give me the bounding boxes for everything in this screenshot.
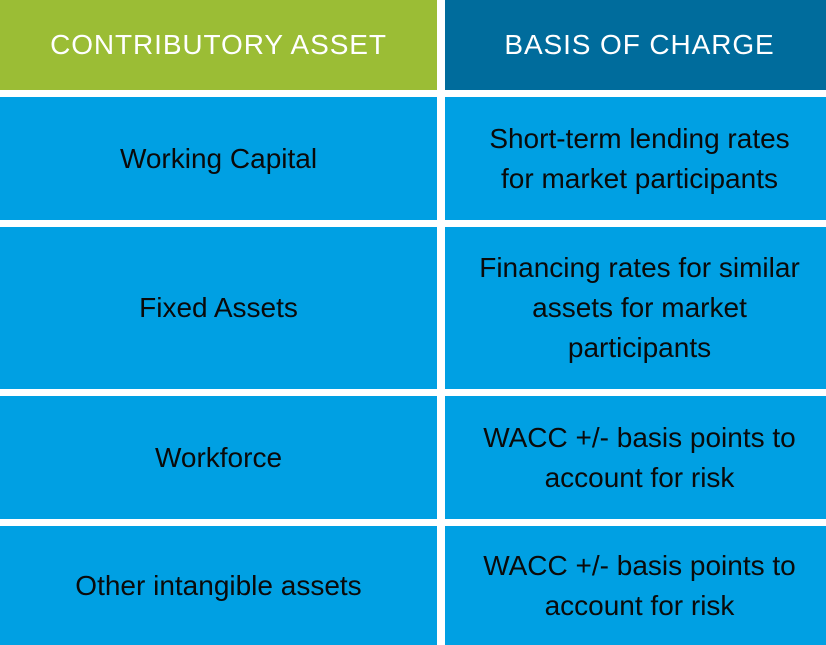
row 4 asset: Other intangible assets — [75, 570, 362, 600]
row 2 basis: assets for market — [532, 292, 747, 323]
row 3 asset: Workforce — [155, 442, 282, 472]
header: contributory asset: CONTRIBUTORY ASSET — [50, 29, 387, 60]
header: basis of charge: BASIS OF CHARGE — [504, 29, 775, 60]
row 1 basis: Short-term lending rates — [489, 122, 790, 154]
row 1 basis — [445, 97, 826, 220]
row 2 asset: Fixed Assets — [139, 292, 298, 323]
row 2 basis — [445, 227, 826, 389]
header: basis of charge — [445, 0, 826, 90]
row 3 basis — [445, 396, 826, 519]
row 4 asset — [0, 526, 437, 645]
row 4 basis: account for risk — [545, 590, 734, 620]
row 3 basis: WACC +/- basis points to — [483, 422, 796, 452]
row 1 asset — [0, 97, 437, 220]
row 2 asset — [0, 227, 437, 389]
header: contributory asset — [0, 0, 437, 90]
row 3 asset — [0, 396, 437, 519]
row 4 basis: WACC +/- basis points to — [483, 550, 796, 580]
row 2 basis: participants — [568, 332, 711, 363]
row 1 asset: Working Capital — [120, 142, 317, 174]
row 3 basis: account for risk — [545, 462, 734, 492]
row 1 basis: for market participants — [501, 162, 778, 194]
row 2 basis: Financing rates for similar — [479, 252, 800, 283]
row 4 basis — [445, 526, 826, 645]
